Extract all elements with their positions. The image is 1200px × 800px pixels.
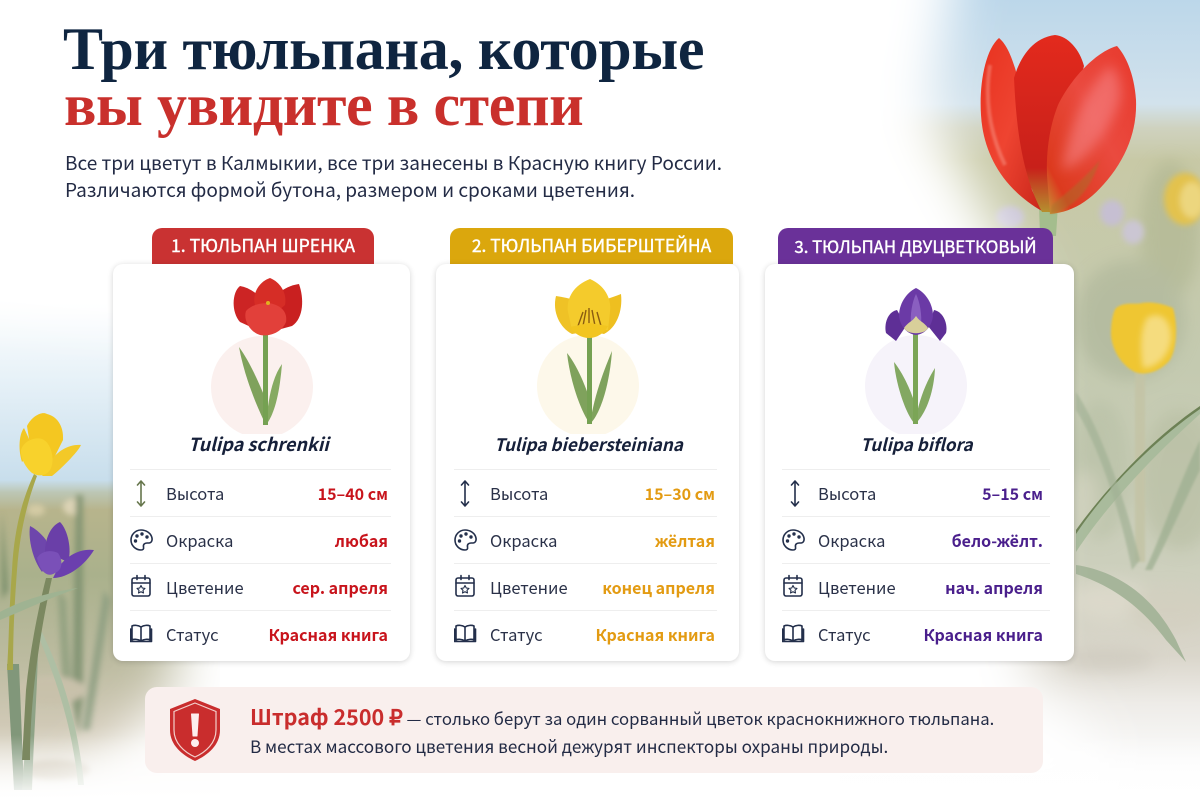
tab: species 1: 1. ТЮЛЬПАН ШРЕНКА	[171, 233, 355, 258]
row: status: Статус	[166, 622, 219, 646]
row: colour: жёлтая	[655, 528, 715, 552]
title: Три тюльпана, которые	[63, 16, 704, 82]
row: colour	[130, 516, 391, 563]
row: bloom: Цветение	[818, 575, 896, 599]
row: bloom: Цветение	[490, 575, 568, 599]
panel: Tulipa biebersteiniana	[436, 264, 739, 661]
row: status: Красная книга	[268, 622, 388, 646]
illustration: yellow tulip	[537, 279, 639, 434]
species name: Tulipa biflora	[860, 431, 973, 456]
species name: Tulipa schrenkii	[188, 431, 329, 457]
row: height	[454, 469, 717, 516]
row: height: 5–15 см	[982, 481, 1043, 505]
subtitle: Различаются формой бутона, размером и сроками цветения.	[65, 176, 635, 203]
tab: species 2	[450, 228, 733, 264]
fine headline: Штраф 2500 ₽ — столько берут за один сорванный цветок краснокнижного тюльпана.	[250, 701, 994, 732]
row: height: Высота	[490, 481, 548, 505]
row: height: 15–40 см	[318, 481, 388, 505]
species name: Tulipa biebersteiniana	[494, 431, 683, 456]
row: bloom: сер. апреля	[292, 575, 388, 599]
row: bloom	[782, 563, 1050, 610]
tab: species 1	[152, 228, 374, 264]
blurred field texture left	[2, 495, 110, 780]
icon: shield with exclamation mark	[170, 699, 220, 761]
icon: large red tulip	[981, 35, 1136, 236]
title	[63, 16, 704, 138]
fine details: В местах массового цветения весной дежурят инспекторы охраны природы.	[250, 733, 888, 758]
background right stem and leaves	[1076, 372, 1200, 662]
row: colour: Окраска	[490, 528, 557, 552]
blurred background flowers	[996, 173, 1200, 244]
row: height	[782, 469, 1050, 516]
row: status	[454, 610, 717, 656]
tab: species 2: 2. ТЮЛЬПАН БИБЕРШТЕЙНА	[472, 233, 711, 258]
row: height: Высота	[166, 481, 224, 505]
subtitle	[65, 149, 722, 203]
panel: Tulipa schrenkii	[113, 264, 410, 661]
row: colour	[454, 516, 717, 563]
subtitle: Все три цветут в Калмыкии, все три занесены в Красную книгу России.	[65, 149, 722, 176]
row: status: Красная книга	[595, 622, 715, 646]
illustration: purple tulip	[865, 288, 967, 434]
row: colour: Окраска	[166, 528, 233, 552]
callout: fine notice	[145, 687, 1043, 773]
row: bloom	[454, 563, 717, 610]
row: height: Высота	[818, 481, 876, 505]
row: colour	[782, 516, 1050, 563]
row: status: Статус	[818, 622, 871, 646]
row: colour: бело-жёлт.	[952, 528, 1043, 552]
row: colour: Окраска	[818, 528, 885, 552]
row: status	[782, 610, 1050, 656]
illustration: red tulip	[211, 278, 313, 434]
row: bloom: конец апреля	[602, 575, 715, 599]
row: bloom	[130, 563, 391, 610]
tab: species 3: 3. ТЮЛЬПАН ДВУЦВЕТКОВЫЙ	[794, 234, 1037, 258]
row: bloom: нач. апреля	[945, 575, 1043, 599]
row: status: Статус	[490, 622, 543, 646]
tab: species 3	[778, 228, 1053, 264]
icon: left yellow tulip	[7, 413, 81, 670]
row: status: Красная книга	[923, 622, 1043, 646]
row: bloom: Цветение	[166, 575, 244, 599]
row: status	[130, 610, 391, 656]
row: colour: любая	[335, 528, 388, 552]
row: height	[130, 469, 391, 516]
title: вы увидите в степи	[64, 72, 583, 138]
row: height: 15–30 см	[645, 481, 715, 505]
icon: left purple tulip	[0, 522, 94, 760]
icon: right yellow tulip	[1111, 303, 1176, 374]
blurred field texture right	[1055, 160, 1200, 672]
left foreground leaves	[7, 632, 84, 790]
panel: Tulipa biflora	[765, 264, 1074, 661]
